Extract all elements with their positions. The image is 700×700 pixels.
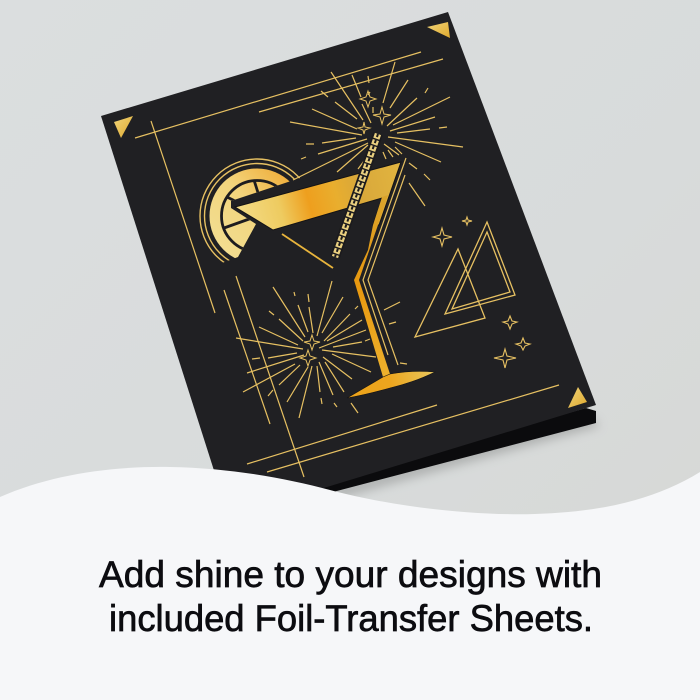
- glass stem foil: [354, 195, 390, 377]
- martini glass: [235, 134, 435, 398]
- bottom sunburst: [236, 281, 376, 418]
- stirrer: [335, 134, 378, 257]
- corner triangle top right: [427, 22, 450, 38]
- sparkle stars: [433, 217, 530, 368]
- black card: [101, 12, 596, 510]
- glass base foil: [347, 371, 435, 398]
- white wave panel: [0, 467, 700, 700]
- stars top sunburst: [360, 91, 376, 107]
- card shadow: [325, 412, 600, 498]
- caption: [99, 554, 602, 639]
- stem ticks: [384, 302, 407, 364]
- overlapping triangles: [415, 222, 515, 337]
- card face: [101, 12, 596, 510]
- lime slice: [199, 158, 300, 262]
- card back panel: [300, 408, 596, 492]
- caption line 2: included Foil-Transfer Sheets.: [109, 598, 593, 639]
- lime inner ring and spokes: [220, 179, 278, 250]
- stars bottom sunburst: [304, 335, 320, 350]
- caption line 1: Add shine to your designs with: [99, 554, 602, 595]
- corner triangle top left: [114, 116, 133, 138]
- top sunburst: [290, 62, 463, 206]
- corner triangle bottom right: [568, 387, 587, 408]
- lime outer arcs: [199, 158, 300, 262]
- stem parallel lines: [363, 158, 406, 365]
- glass bowl foil band: [235, 162, 401, 230]
- bowl inner edge: [282, 234, 333, 268]
- lime foil disc: [210, 168, 290, 258]
- border lines: [135, 52, 559, 477]
